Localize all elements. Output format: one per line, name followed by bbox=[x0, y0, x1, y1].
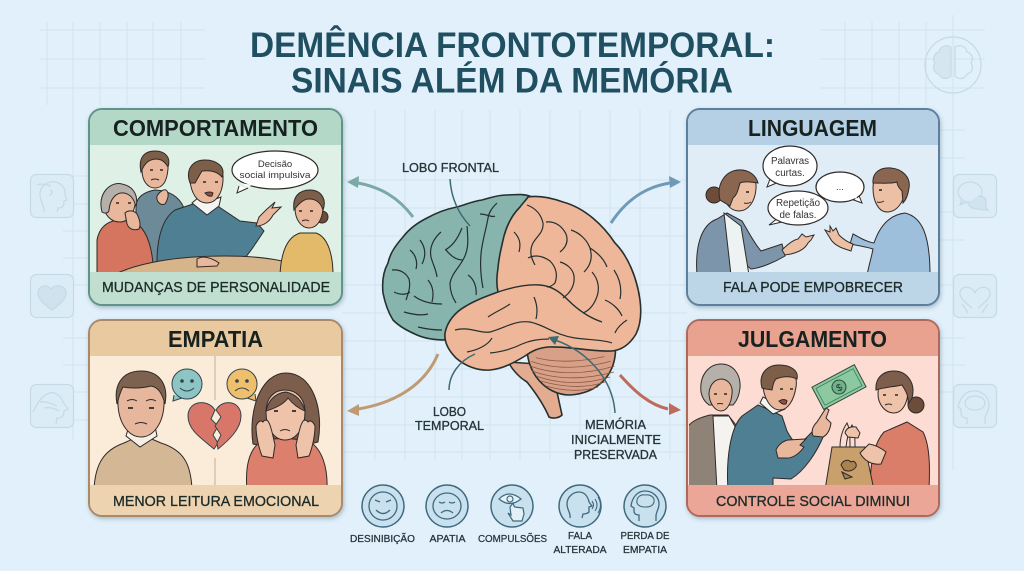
speech bubble: decisão: social impulsiva bbox=[240, 170, 311, 181]
label: memória inicialmente preservada bbox=[548, 336, 661, 462]
title bbox=[250, 25, 775, 100]
icon: happy emoji bubble bbox=[172, 369, 202, 401]
scene: group at a table bbox=[97, 151, 333, 278]
icon: right head with brain bbox=[954, 384, 996, 428]
arrow: brain to julgamento bbox=[620, 375, 681, 415]
cerebellum bbox=[526, 348, 616, 396]
heading: comportamento: COMPORTAMENTO bbox=[113, 115, 318, 141]
icon: right speech bubbles bbox=[954, 174, 996, 218]
icon: top-right brain badge bbox=[925, 37, 981, 93]
arrow: brain to linguagem bbox=[611, 176, 681, 223]
speech bubble: palavras curtas: Palavras bbox=[771, 156, 809, 167]
icon: banknote bbox=[812, 365, 866, 409]
scene: impulsive purchase bbox=[686, 364, 929, 491]
label: lobo frontal bbox=[402, 161, 499, 226]
label: lobo temporal: TEMPORAL bbox=[415, 419, 484, 433]
icon: sad emoji bubble bbox=[227, 369, 257, 401]
symptom icon: perda de empatia bbox=[620, 485, 670, 556]
symptom icon: apatia: APATIA bbox=[430, 534, 466, 545]
label: lobo frontal: LOBO FRONTAL bbox=[402, 161, 499, 175]
symptom icon: compulsões bbox=[478, 485, 547, 545]
icon: right hands heart bbox=[954, 274, 996, 318]
symptom icon: fala alterada bbox=[554, 485, 607, 556]
label: lobo temporal bbox=[415, 354, 484, 433]
icon: broken heart bbox=[188, 403, 241, 449]
frontal lobe bbox=[383, 194, 532, 340]
speech bubble: repetição de falas: de falas. bbox=[779, 210, 817, 221]
symptom icon: fala alterada: FALA bbox=[568, 531, 592, 542]
icon: left head with hand bbox=[30, 384, 74, 428]
symptom icon: perda de empatia: EMPATIA bbox=[623, 545, 667, 556]
speech bubble: decisão: Decisão bbox=[258, 159, 292, 170]
scene: two people talking bbox=[697, 168, 930, 275]
caption: fala pode empobrecer: FALA PODE EMPOBRECER bbox=[723, 279, 903, 296]
label: memória inicialmente preservada: PRESERVADA bbox=[574, 448, 658, 462]
label: lobo temporal: LOBO bbox=[433, 405, 466, 419]
heading: empatia: EMPATIA bbox=[168, 326, 263, 352]
speech bubble: repetição de falas: Repetição bbox=[776, 198, 821, 209]
label: memória inicialmente preservada: INICIALMENTE bbox=[571, 433, 661, 447]
caption: menor leitura emocional: MENOR LEITURA EMOCIONAL bbox=[113, 493, 319, 510]
label: memória inicialmente preservada: MEMÓRIA bbox=[585, 417, 647, 432]
parietal, occipital and temporal lobes bbox=[445, 196, 641, 370]
title: SINAIS ALÉM DA MEMÓRIA bbox=[291, 60, 733, 100]
speech bubble: repetição de falas bbox=[768, 191, 828, 225]
panel: julgamento bbox=[686, 320, 939, 516]
caption: mudanças de personalidade: MUDANÇAS DE PERSONALIDADE bbox=[102, 279, 330, 296]
heading: linguagem: LINGUAGEM bbox=[748, 115, 877, 141]
scene: man and woman bbox=[94, 371, 327, 490]
brain stem bbox=[508, 362, 562, 418]
symptom icon: compulsões: COMPULSÕES bbox=[478, 534, 547, 545]
panel: linguagem bbox=[687, 109, 939, 305]
caption: controle social diminui: CONTROLE SOCIAL DIMINUI bbox=[716, 493, 910, 510]
icon: left head with spark bbox=[30, 174, 74, 218]
speech bubble: palavras curtas bbox=[763, 146, 817, 187]
arrow: brain to comportamento bbox=[347, 176, 413, 217]
symptom icon: fala alterada: ALTERADA bbox=[554, 545, 607, 556]
speech bubble: ellipsis bbox=[816, 172, 864, 203]
symptom icon: desinibição bbox=[350, 485, 415, 545]
symptom icon: apatia bbox=[426, 485, 468, 545]
brain illustration bbox=[383, 194, 641, 418]
symptom icon: desinibição: DESINIBIÇÃO bbox=[350, 534, 415, 545]
symptom icon: perda de empatia: PERDA DE bbox=[620, 531, 670, 542]
panel: empatia bbox=[89, 320, 342, 516]
speech bubble: palavras curtas: curtas. bbox=[775, 168, 805, 179]
panel: comportamento bbox=[89, 109, 342, 305]
speech bubble: decisão bbox=[232, 151, 318, 193]
heading: julgamento: JULGAMENTO bbox=[738, 326, 887, 352]
arrow: brain to empatia bbox=[347, 354, 438, 416]
title: DEMÊNCIA FRONTOTEMPORAL: bbox=[250, 25, 775, 65]
icon: banknote: $ bbox=[835, 382, 845, 394]
speech bubble: ellipsis: ... bbox=[836, 182, 844, 193]
icon: left broken heart bbox=[30, 274, 74, 318]
